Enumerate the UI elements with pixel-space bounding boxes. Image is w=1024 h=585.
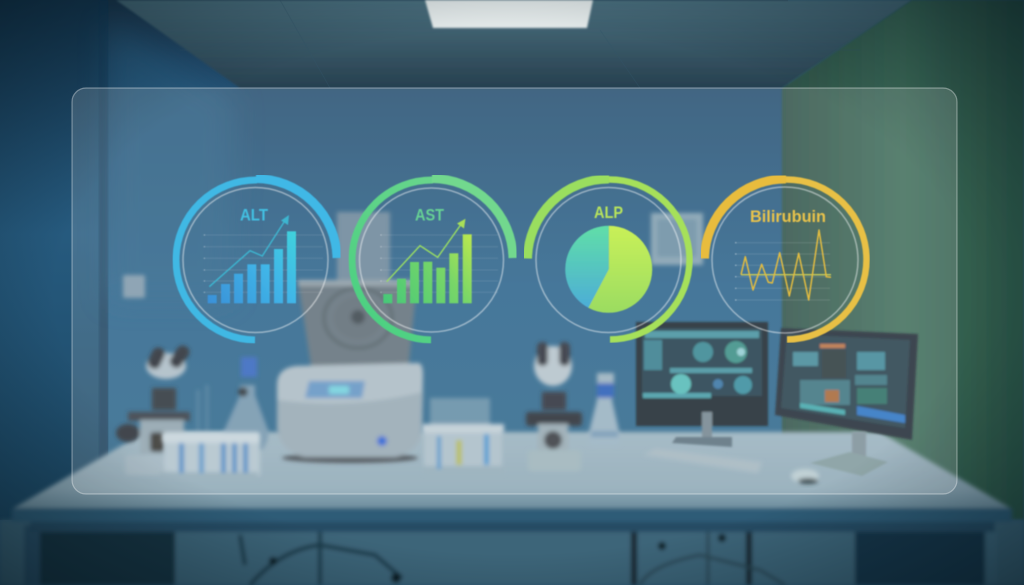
left microscope — [116, 343, 192, 475]
lab bench — [0, 432, 1024, 585]
ALT bar chart — [203, 215, 323, 303]
ALP ring — [528, 179, 690, 340]
ALP label: ALP — [594, 203, 623, 222]
AST ring — [352, 178, 513, 340]
flask — [222, 357, 268, 450]
gauge: Bilirubin — [704, 179, 867, 340]
Bilirubin label: Bilirubuin — [750, 208, 826, 226]
centrifuge — [277, 280, 423, 463]
left monitor — [636, 322, 768, 447]
bottle — [587, 373, 621, 446]
keyboard and mouse — [644, 448, 819, 484]
Bilirubin line chart — [735, 230, 831, 300]
gauge: ALT — [176, 178, 337, 340]
ALT label: ALT — [240, 206, 269, 225]
wall fixtures — [123, 212, 703, 298]
right monitor — [775, 328, 918, 476]
ALT ring — [176, 178, 337, 340]
gauge: AST — [352, 178, 513, 340]
glass panel — [72, 88, 957, 494]
ALP pie chart — [565, 226, 652, 313]
right test tube rack — [422, 398, 504, 474]
AST label: AST — [415, 206, 445, 225]
gauge: ALP — [528, 179, 690, 340]
left test tube rack — [160, 385, 260, 480]
AST bar chart — [380, 219, 498, 303]
Bilirubin ring — [704, 179, 867, 340]
centre microscope — [526, 342, 582, 471]
